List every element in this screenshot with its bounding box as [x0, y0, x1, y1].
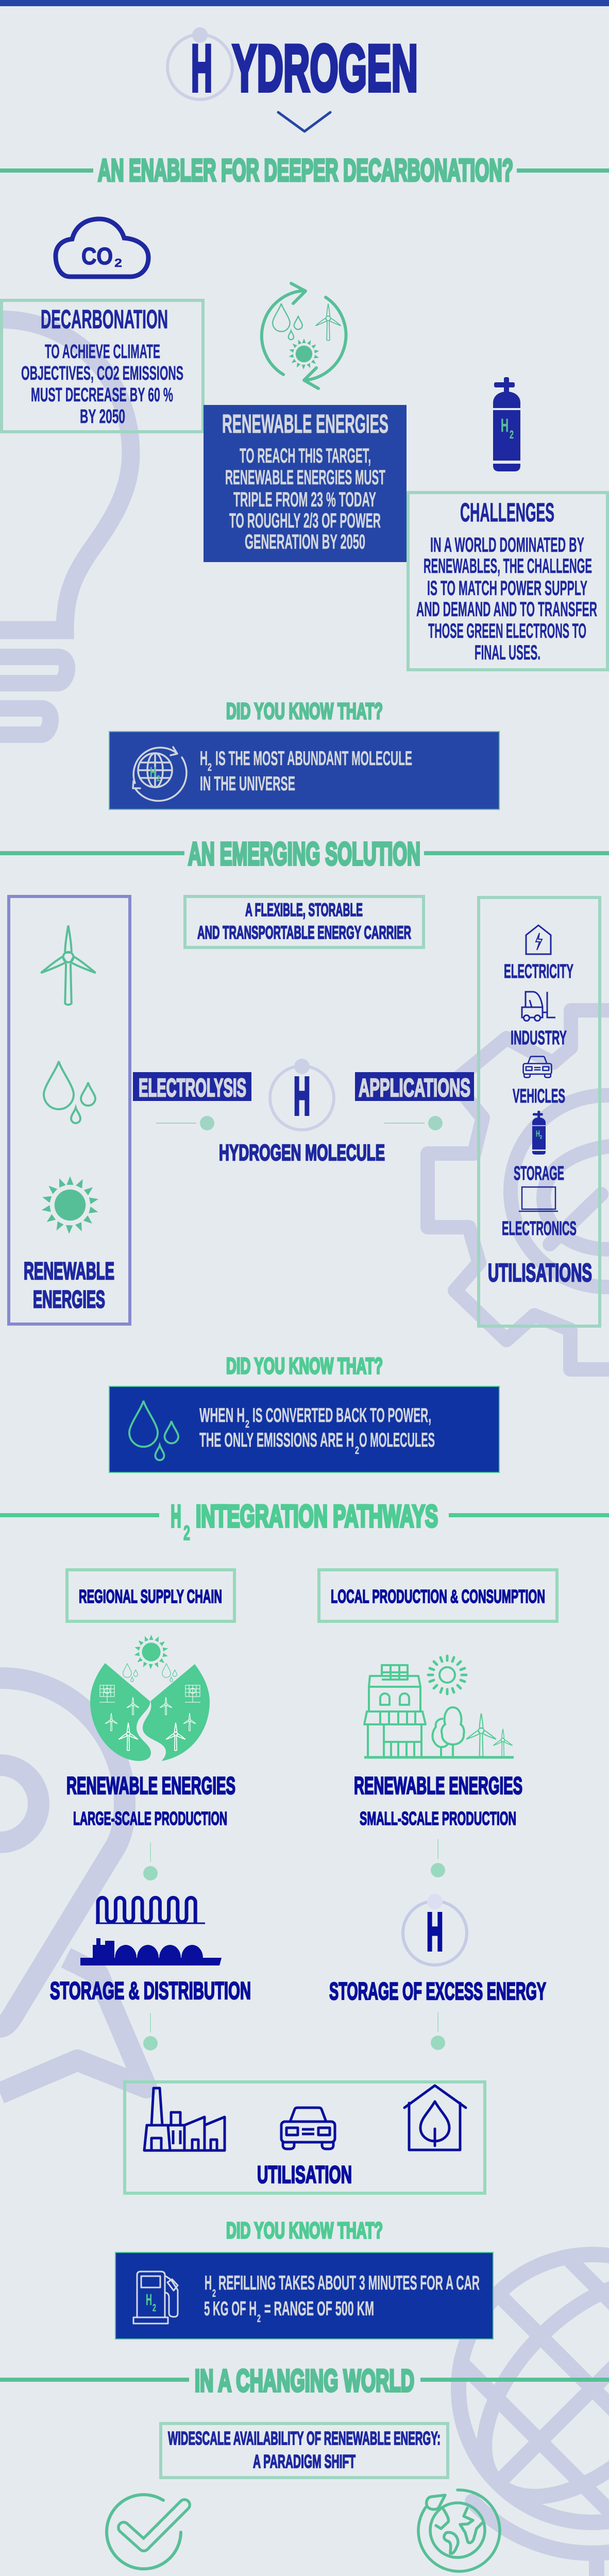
label: industry: INDUSTRY — [511, 1027, 567, 1049]
icon: factory — [144, 2088, 225, 2150]
callout text: 2 — [208, 761, 212, 773]
icon: globe with arrows — [133, 747, 187, 801]
panel: renewable energies sources — [9, 896, 130, 1324]
callout text: IN THE UNIVERSE — [200, 773, 295, 795]
label: electrolysis: ELECTROLYSIS — [139, 1074, 246, 1102]
icon: storage tank: H — [536, 1129, 540, 1139]
callout text: = RANGE OF 500 KM — [264, 2298, 374, 2320]
callout text: IS CONVERTED BACK TO POWER, — [252, 1404, 431, 1427]
section heading: integration pathways: H — [171, 1499, 181, 1533]
callout text: O MOLECULES — [359, 1429, 435, 1451]
panel body text — [416, 534, 597, 664]
icon: pipes — [96, 1897, 205, 1923]
section heading: changing world: IN A CHANGING WORLD — [195, 2364, 414, 2398]
callout text: 2 — [355, 1445, 359, 1456]
panel: challenges — [408, 493, 607, 670]
callout text — [199, 1404, 435, 1456]
icon: fuel pump: H — [146, 2291, 152, 2309]
callout text: IS THE MOST ABUNDANT MOLECULE — [215, 748, 412, 770]
section heading: emerging solution — [0, 837, 609, 872]
panel body text: TRIPLE FROM 23 % TODAY — [233, 488, 376, 511]
panel: carrier caption — [185, 896, 424, 947]
callout text: 5 KG OF H — [204, 2298, 257, 2320]
section heading: emerging solution: AN EMERGING SOLUTION — [188, 837, 420, 872]
section heading: integration pathways: INTEGRATION PATHWAYS — [196, 1499, 438, 1533]
icon: globe with arrows: H — [150, 764, 156, 780]
icon: globe with arrows: 2 — [157, 774, 160, 783]
icon: hydrogen tank: H — [501, 415, 509, 436]
callout: did you know 1 — [109, 732, 499, 809]
title remainder: YDROGEN — [232, 32, 418, 105]
background icon: gear — [428, 1010, 609, 1369]
label: storage and distribution: STORAGE & DISTRIBUTION — [50, 1977, 251, 2004]
panel body text: TO ACHIEVE CLIMATE — [45, 341, 160, 363]
panel: carrier caption: A FLEXIBLE, STORABLE — [245, 900, 363, 920]
panel: regional supply chain: REGIONAL SUPPLY CHAIN — [79, 1586, 222, 1607]
icon: hydrogen molecule — [270, 1059, 334, 1130]
icon: laptop — [519, 1187, 558, 1211]
callout: did you know 3 — [115, 2252, 493, 2339]
label: renewable energies left: RENEWABLE ENERGIES — [66, 1772, 235, 1799]
background icon: globe — [403, 2199, 609, 2576]
icon: check mark — [107, 2495, 184, 2569]
panel label: RENEWABLE — [24, 1257, 114, 1284]
panel: utilisations — [479, 897, 600, 1326]
arrow: left connector 2 — [143, 2013, 158, 2050]
top bar — [0, 0, 609, 6]
title: H — [191, 32, 212, 105]
callout text: WHEN H — [199, 1404, 245, 1427]
arrow: electrolysis connector — [156, 1116, 214, 1130]
panel label: ENERGIES — [33, 1285, 105, 1313]
icon: storage tank — [532, 1111, 546, 1155]
label: applications — [355, 1072, 474, 1102]
icon: hydrogen molecule storage: H — [427, 1902, 443, 1961]
icon: forklift — [522, 992, 555, 1021]
arrow: applications connector — [384, 1116, 443, 1130]
arrow: left connector 1 — [143, 1842, 158, 1880]
label: applications: APPLICATIONS — [359, 1074, 470, 1102]
panel body text: OBJECTIVES, CO2 EMISSIONS — [21, 363, 183, 384]
label: vehicles: VEHICLES — [513, 1086, 565, 1107]
icon: CO2 cloud: CO — [81, 243, 113, 269]
panel: carrier caption: AND TRANSPORTABLE ENERGY CARRIER — [197, 923, 411, 943]
icon: car — [281, 2108, 335, 2149]
section heading: integration pathways — [0, 1499, 609, 1545]
panel body text — [225, 445, 385, 553]
panel body text: GENERATION BY 2050 — [245, 531, 365, 553]
icon: small turbine — [493, 1729, 513, 1757]
panel: regional supply chain — [67, 1570, 234, 1621]
icon: hydrogen tank — [493, 377, 520, 471]
panel: utilisation — [125, 2082, 485, 2193]
callout text — [204, 2272, 480, 2325]
icon: electricity house — [526, 925, 551, 954]
panel: paradigm shift — [161, 2424, 448, 2478]
icon: wind turbine — [39, 925, 97, 1005]
panel heading: RENEWABLE ENERGIES — [222, 409, 388, 438]
icon: small-scale building with trees — [364, 1656, 514, 1757]
panel label: UTILISATION — [257, 2161, 352, 2188]
panel body text: BY 2050 — [80, 406, 125, 428]
label: large-scale: LARGE-SCALE PRODUCTION — [73, 1808, 227, 1829]
callout: did you know 2 — [109, 1386, 499, 1472]
panel body text: RENEWABLE ENERGIES MUST — [225, 466, 385, 489]
icon: vehicle — [523, 1057, 551, 1077]
icon: eco house — [404, 2086, 466, 2150]
icon: earth with leaf — [418, 2490, 500, 2571]
icon: sun — [41, 1176, 99, 1234]
panel body text: MUST DECREASE BY 60 % — [31, 384, 173, 406]
section heading: integration pathways: 2 — [183, 1522, 190, 1545]
panel body text: FINAL USES. — [475, 641, 540, 664]
callout text: 2 — [257, 2313, 261, 2325]
icon: hydrogen tank: 2 — [510, 428, 514, 441]
heading: did you know 3: DID YOU KNOW THAT? — [226, 2218, 383, 2243]
icon: chevron — [278, 112, 330, 131]
callout text: 2 — [212, 2287, 216, 2299]
callout text — [200, 748, 412, 795]
panel: decarbonation — [2, 300, 203, 432]
icon: CO2 cloud: 2 — [114, 256, 122, 269]
icon: large turbine — [465, 1714, 497, 1756]
icon: hydrogen molecule storage — [403, 1894, 467, 1965]
background icon: light bulb — [0, 319, 131, 735]
icon: fuel pump: 2 — [153, 2302, 156, 2314]
callout text: 2 — [245, 1418, 249, 1430]
heading: did you know 1: DID YOU KNOW THAT? — [226, 699, 383, 724]
callout text: H — [200, 748, 208, 770]
panel heading: DECARBONATION — [41, 304, 168, 334]
panel body text — [21, 341, 183, 428]
icon: fuel pump — [133, 2272, 178, 2324]
icon: CO2 cloud — [56, 219, 148, 277]
icon: hydrogen molecule: H — [294, 1066, 310, 1126]
arrow: right connector 1 — [431, 1839, 445, 1877]
section heading: changing world — [0, 2364, 609, 2398]
panel label — [24, 1257, 114, 1313]
panel: renewable energies — [204, 405, 407, 562]
label: hydrogen molecule: HYDROGEN MOLECULE — [219, 1140, 385, 1165]
title — [167, 27, 418, 105]
arrow: right connector 2 — [431, 2012, 445, 2050]
icon: LNG ship — [80, 1938, 222, 1965]
panel: paradigm shift: A PARADIGM SHIFT — [253, 2451, 356, 2472]
icon: storage tank: 2 — [540, 1134, 542, 1140]
callout text: H — [205, 2272, 212, 2294]
icon: water drops — [129, 1401, 178, 1460]
panel: local production — [319, 1570, 557, 1621]
icon: renewable cycle — [262, 283, 346, 388]
panel body text: TO ROUGHLY 2/3 OF POWER — [229, 510, 381, 532]
icon: hydrogen atom ring — [167, 27, 232, 99]
label: storage: STORAGE — [514, 1163, 564, 1184]
panel body text: TO REACH THIS TARGET, — [240, 445, 371, 467]
callout text: THE ONLY EMISSIONS ARE H — [199, 1429, 354, 1451]
icon: large-scale renewable valley — [90, 1635, 210, 1761]
label: electrolysis — [133, 1072, 251, 1102]
background icon: wind turbine — [0, 1678, 146, 2093]
heading: did you know 2: DID YOU KNOW THAT? — [226, 1353, 383, 1379]
icon: water drops — [44, 1061, 95, 1123]
